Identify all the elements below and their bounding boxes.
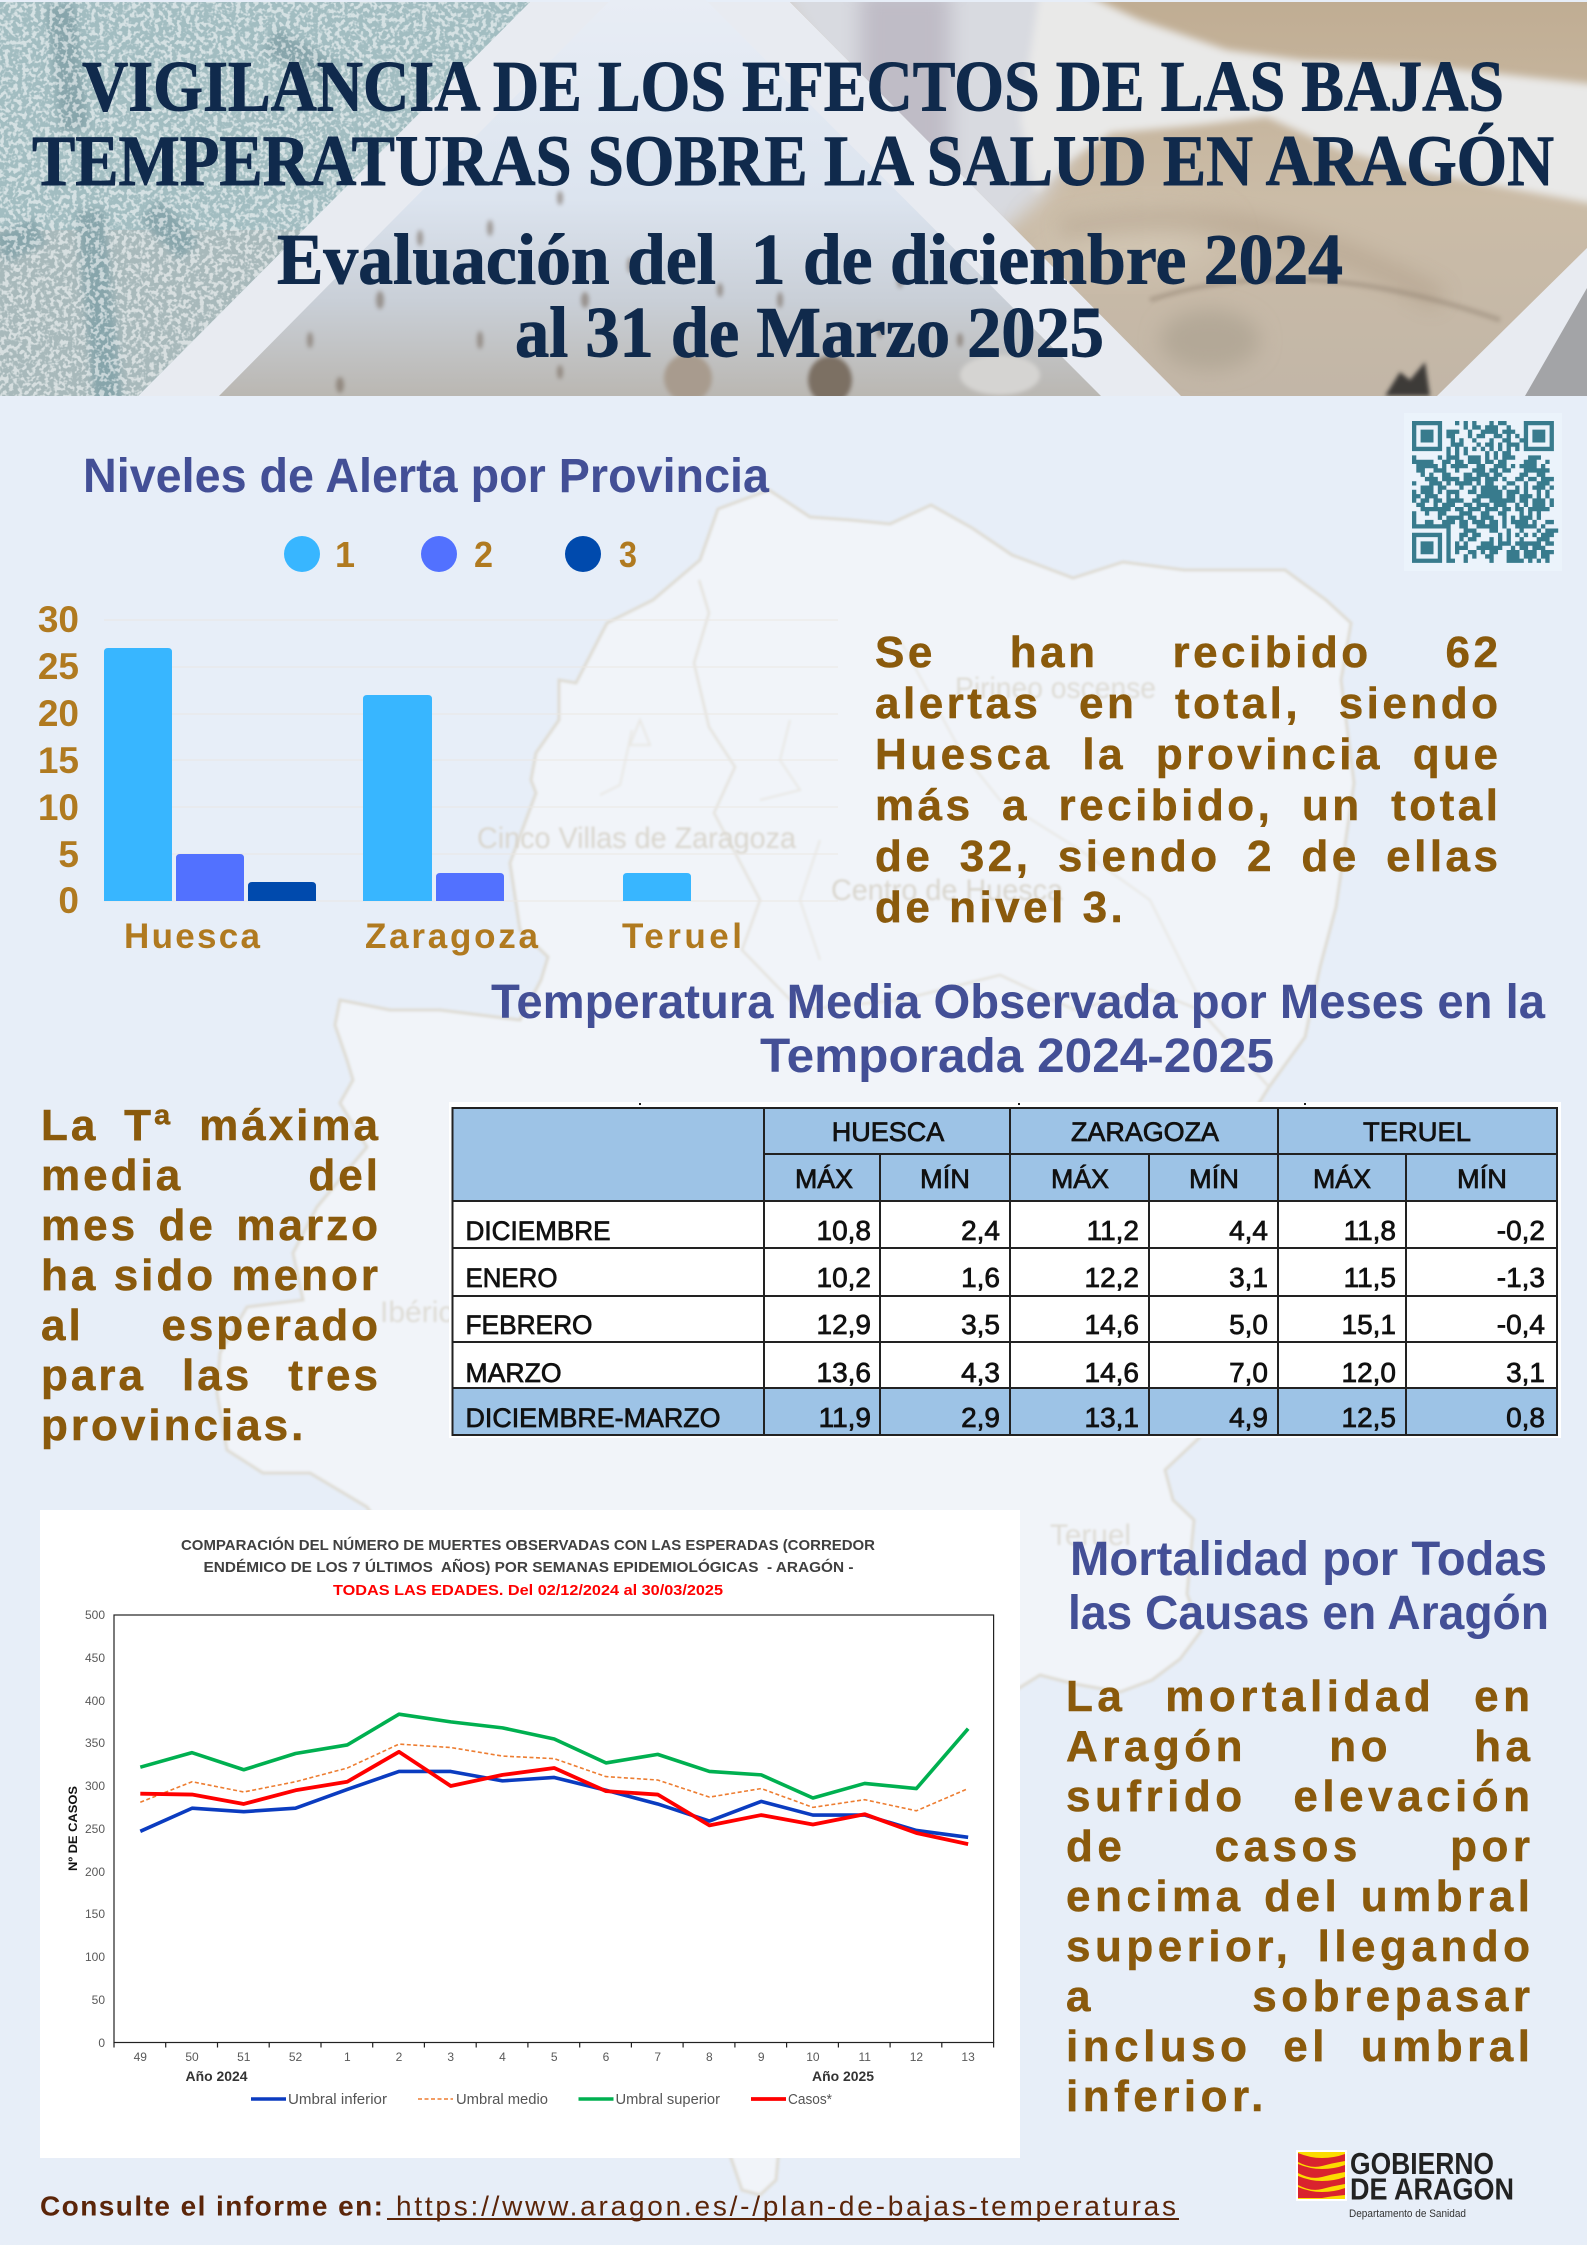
line: umbral medio	[140, 1744, 968, 1811]
legend: alert levels: 3	[619, 534, 637, 575]
data cells: 2,9	[961, 1402, 1000, 1433]
bars: Huesca	[104, 648, 316, 901]
text block: maximum temperature in March: provincias.	[41, 1401, 306, 1450]
heading: Mortalidad por Todas las Causas	[1068, 1533, 1549, 1640]
x axis labels: 2	[396, 2050, 403, 2064]
data cells: -1,3	[1497, 1262, 1545, 1293]
text block: mortality	[1066, 1672, 1534, 2121]
background map of Aragón: Cinco Villas de Zaragoza	[477, 822, 796, 855]
data cells: 12,2	[1084, 1262, 1139, 1293]
logo text: Departamento de Sanidad	[1349, 2208, 1466, 2220]
heading: Temperatura Media Observada: Temporada 2024-2025	[760, 1030, 1274, 1083]
text block: mortality: superior, llegando	[1066, 1922, 1534, 1971]
y axis labels: 150	[85, 1907, 105, 1921]
text block: mortality: incluso el umbral	[1066, 2022, 1534, 2071]
y axis labels: 0	[98, 2036, 105, 2050]
y axis labels: 300	[85, 1779, 105, 1793]
background map of Aragón: Centro de Huesca	[831, 874, 1063, 907]
text block: total alerts	[875, 628, 1502, 932]
data cells: 4,4	[1229, 1215, 1268, 1246]
x axis labels: 51	[237, 2050, 251, 2064]
x axis labels: Zaragoza	[365, 917, 539, 956]
footer link: Consulte el informe en:	[40, 2190, 383, 2222]
subtitle: evaluation period	[277, 219, 1343, 373]
data cells: 11,2	[1087, 1215, 1139, 1246]
province headers: MÍN	[1189, 1164, 1239, 1194]
text block: total alerts: de 32, siendo 2 de ellas	[875, 832, 1502, 881]
y axis labels: 400	[85, 1694, 105, 1708]
text block: mortality: a sobrepasar	[1066, 1972, 1534, 2021]
y axis labels: 200	[85, 1865, 105, 1879]
x axis labels: 13	[961, 2050, 975, 2064]
y axis labels: 20	[38, 693, 79, 734]
legend: alert levels	[284, 534, 637, 575]
heading: Mortalidad por Todas las Causas: las Causas en Aragón	[1068, 1587, 1549, 1640]
chart title	[181, 1536, 875, 1599]
data cells: -0,2	[1497, 1215, 1545, 1246]
photo: snow on carved stone	[760, 0, 1587, 396]
chart title: TODAS LAS EDADES. Del 02/12/2024 al 30/03/2025	[333, 1582, 723, 1599]
chart legend: Casos*	[788, 2092, 832, 2108]
text block: mortality: encima del umbral	[1066, 1872, 1534, 1921]
data cells: 2,4	[961, 1215, 1000, 1246]
y axis labels: 50	[92, 1993, 105, 2007]
province headers: HUESCA	[832, 1117, 944, 1147]
table: mean temperature by month	[449, 1102, 1561, 1438]
light band base	[0, 2, 1587, 396]
photo: frosted plants	[219, 133, 1101, 396]
plot frame	[114, 1615, 994, 2048]
province headers	[795, 1117, 1507, 1194]
y axis labels: 5	[58, 834, 79, 875]
province headers: MÁX	[1051, 1164, 1109, 1194]
text block: mortality: inferior.	[1066, 2072, 1268, 2121]
data cells: 15,1	[1342, 1309, 1396, 1340]
data cells	[816, 1215, 1545, 1433]
heading: Mortalidad por Todas las Causas: Mortalidad por Todas	[1070, 1533, 1547, 1586]
province headers: ZARAGOZA	[1071, 1117, 1219, 1147]
chart legend: Umbral medio	[456, 2092, 548, 2108]
heading: Temperatura Media Observada: Temperatura Media Observada por Meses en la	[491, 976, 1545, 1029]
subtitle: evaluation period: al 31 de Marzo 2025	[515, 293, 1104, 373]
month labels	[466, 1216, 720, 1433]
y axis labels: 450	[85, 1651, 105, 1665]
text block: total alerts: más a recibido, un total	[875, 781, 1502, 830]
x axis labels: 52	[289, 2050, 302, 2064]
data cells: 4,9	[1229, 1402, 1268, 1433]
text block: maximum temperature in March: media del	[41, 1151, 381, 1200]
y axis labels: 100	[85, 1950, 105, 1964]
text block: mortality: Aragón no ha	[1066, 1722, 1534, 1771]
bars: Teruel	[623, 873, 691, 901]
year labels: Año 2024	[186, 2068, 248, 2084]
data cells: 5,0	[1229, 1309, 1268, 1340]
x axis labels: 12	[910, 2050, 923, 2064]
text block: mortality: La mortalidad en	[1066, 1672, 1534, 1721]
chart legend: Umbral superior	[616, 2092, 720, 2108]
data cells: -0,4	[1497, 1309, 1545, 1340]
data cells: 1,6	[961, 1262, 1000, 1293]
line: umbral superior	[140, 1714, 968, 1798]
x axis labels: 6	[603, 2050, 610, 2064]
logo: Gobierno de Aragón	[1296, 2146, 1514, 2220]
year labels	[186, 2068, 874, 2084]
y axis labels: 0	[58, 880, 79, 921]
text block: maximum temperature in March: ha sido menor	[41, 1251, 381, 1300]
heading: Niveles de Alerta por Provincia: Niveles de Alerta por Provincia	[83, 450, 769, 503]
province headers: MÍN	[1457, 1164, 1507, 1194]
x axis labels: 9	[758, 2050, 765, 2064]
logo text	[1349, 2146, 1514, 2220]
x axis labels: 8	[706, 2050, 713, 2064]
x axis labels: 3	[447, 2050, 454, 2064]
data cells: 13,6	[816, 1357, 871, 1388]
data cells: 11,8	[1344, 1215, 1396, 1246]
x axis labels: 49	[134, 2050, 147, 2064]
footer link: https://www.aragon.es/-/plan-de-bajas-temperaturas	[396, 2190, 1176, 2222]
y axis labels: 30	[38, 600, 79, 640]
icon: Aragón flag	[1296, 2150, 1347, 2201]
chart legend: Umbral inferior	[288, 2092, 387, 2108]
data cells: 12,9	[816, 1309, 871, 1340]
subtitle: evaluation period: Evaluación del 1 de diciembre 2024	[277, 219, 1343, 299]
x axis labels: 4	[499, 2050, 506, 2064]
text block: maximum temperature in March: mes de marzo	[41, 1201, 381, 1250]
text block: total alerts: Se han recibido 62	[875, 628, 1502, 677]
province headers: MÁX	[1313, 1164, 1371, 1194]
data cells: 3,1	[1229, 1262, 1268, 1293]
data cells: 7,0	[1229, 1357, 1268, 1388]
data lines	[140, 1714, 968, 1844]
footer link	[40, 2190, 1179, 2222]
data cells: 3,5	[961, 1309, 1000, 1340]
x axis labels: 50	[185, 2050, 199, 2064]
x axis labels: 5	[551, 2050, 558, 2064]
y axis labels: 10	[38, 787, 79, 828]
province headers: MÍN	[920, 1164, 970, 1194]
month labels: DICIEMBRE	[466, 1216, 610, 1246]
y axis labels: 250	[85, 1822, 105, 1836]
data cells: 14,6	[1084, 1309, 1139, 1340]
x axis labels	[134, 2050, 975, 2064]
data cells: 4,3	[961, 1357, 1000, 1388]
x axis labels: Teruel	[622, 917, 742, 956]
text block: total alerts: Huesca la provincia que	[875, 730, 1502, 779]
QR code	[1412, 421, 1558, 563]
data cells: 14,6	[1084, 1357, 1139, 1388]
year labels: Año 2025	[812, 2068, 874, 2084]
data cells: 13,1	[1084, 1402, 1139, 1433]
month labels: MARZO	[466, 1358, 562, 1388]
text block: mortality: de casos por	[1066, 1822, 1534, 1871]
data cells: 10,2	[816, 1262, 871, 1293]
corner snow patch	[1525, 288, 1587, 396]
text block: mortality: sufrido elevación	[1066, 1772, 1534, 1821]
chart legend	[251, 2092, 832, 2108]
data cells: 12,5	[1342, 1402, 1396, 1433]
line: umbral inferior	[140, 1771, 968, 1837]
line: casos	[140, 1752, 968, 1844]
line chart: observed vs expected deaths	[40, 1510, 1020, 2158]
logo text: GOBIERNO	[1350, 2146, 1494, 2181]
header banner	[0, 2, 1587, 396]
y axis labels: 15	[38, 740, 79, 781]
text block: maximum temperature in March: La Tª máxima	[41, 1101, 381, 1150]
background map of Aragón: Ibérica	[380, 1296, 470, 1329]
data cells: 3,1	[1506, 1357, 1545, 1388]
data cells: 0,8	[1506, 1402, 1545, 1433]
x axis labels: Huesca	[124, 917, 261, 956]
title	[32, 47, 1554, 201]
bar chart: alerts per province	[38, 600, 838, 956]
chart title: ENDÉMICO DE LOS 7 ÚLTIMOS AÑOS) POR SEMANAS EPIDEMIOLÓGICAS - ARAGÓN -	[204, 1558, 854, 1576]
month labels: FEBRERO	[466, 1310, 592, 1340]
province headers: TERUEL	[1363, 1117, 1471, 1147]
month labels: ENERO	[466, 1263, 558, 1293]
x axis labels	[124, 917, 742, 956]
data cells: 10,8	[816, 1215, 871, 1246]
month labels: DICIEMBRE-MARZO	[466, 1403, 720, 1433]
text block: total alerts: alertas en total, siendo	[875, 679, 1502, 728]
legend: alert levels: 1	[335, 534, 355, 575]
province headers: MÁX	[795, 1164, 853, 1194]
photo: snowy crystal	[0, 2, 540, 420]
legend: alert levels: 2	[474, 534, 493, 575]
background map of Aragón: Teruel	[1050, 1519, 1131, 1552]
text block: maximum temperature in March	[41, 1101, 381, 1450]
text block: maximum temperature in March: para las tres	[41, 1351, 381, 1400]
heading: Temperatura Media Observada	[491, 976, 1546, 1083]
x axis labels: 7	[654, 2050, 661, 2064]
y axis labels: 350	[85, 1736, 105, 1750]
data cells: 11,9	[819, 1402, 871, 1433]
x axis labels: 11	[858, 2050, 871, 2064]
data cells: 11,5	[1344, 1262, 1396, 1293]
chart title: COMPARACIÓN DEL NÚMERO DE MUERTES OBSERVADAS CON LAS ESPERADAS (CORREDOR	[181, 1536, 875, 1554]
text block: total alerts: de nivel 3.	[875, 883, 1126, 932]
bars: Zaragoza	[363, 695, 504, 901]
x axis labels: 1	[344, 2050, 351, 2064]
data cells: 12,0	[1342, 1357, 1396, 1388]
y axis labels	[85, 1608, 105, 2050]
y axis title: Nº DE CASOS	[66, 1786, 80, 1871]
background map of Aragón: Pirineo oscense	[955, 672, 1156, 705]
y axis labels: 25	[38, 646, 79, 687]
x axis labels: 10	[806, 2050, 820, 2064]
text block: maximum temperature in March: al esperado	[41, 1301, 381, 1350]
y axis labels	[38, 599, 79, 921]
y axis labels: 500	[85, 1608, 105, 1622]
